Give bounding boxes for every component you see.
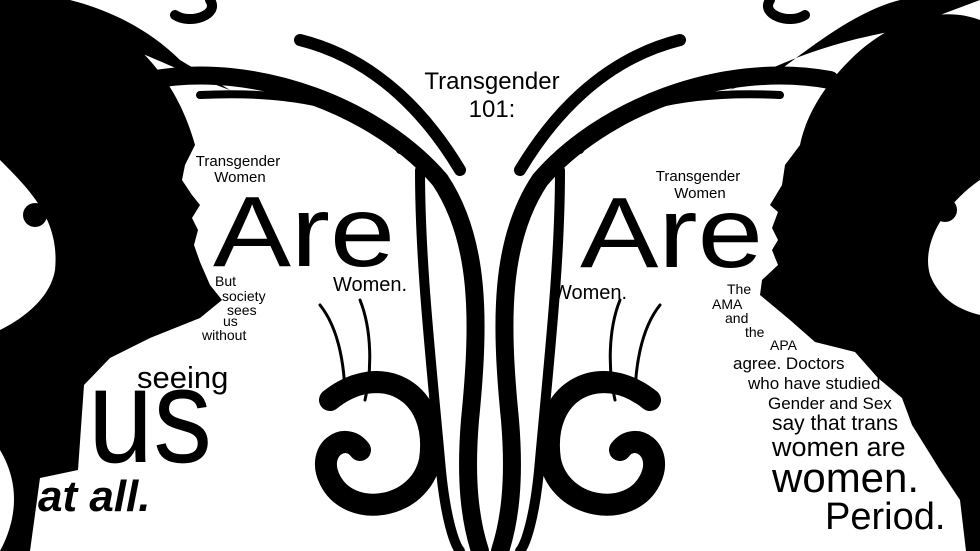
left text block: society (222, 288, 266, 304)
left text block: But (215, 273, 236, 289)
right text block: the (745, 324, 765, 340)
right text block: Women. (553, 282, 627, 304)
left text block: at all. (38, 472, 150, 521)
left text block: Women (214, 169, 266, 186)
left text block: Women. (333, 274, 407, 296)
right text block: Women (674, 185, 726, 202)
left text block: without (201, 327, 246, 343)
central ornament (150, 0, 830, 551)
left text block: sees (227, 302, 257, 318)
right text block: and (725, 310, 748, 326)
left text block: seeing (137, 360, 228, 395)
right text block (553, 168, 945, 538)
left text block: us (223, 313, 238, 329)
right text block: women are (771, 432, 906, 462)
right text block: women. (771, 454, 919, 501)
right text block: APA (770, 337, 798, 353)
right text block: Period. (825, 496, 945, 538)
right text block: AMA (712, 296, 743, 312)
right text block: Transgender (656, 168, 740, 185)
right text block: The (727, 281, 751, 297)
left text block: Transgender (196, 153, 280, 170)
right text block: agree. Doctors (733, 354, 844, 373)
right text block: who have studied (747, 374, 880, 393)
title: 101: (469, 96, 515, 123)
right silhouette (730, 0, 980, 551)
left text block (38, 153, 407, 521)
right text block: say that trans (772, 412, 898, 435)
right text block: Gender and Sex (768, 394, 892, 413)
left text block: us (88, 340, 212, 491)
title (424, 68, 560, 123)
left text block: Are (213, 176, 395, 288)
title: Transgender (424, 68, 560, 95)
right text block: Are (580, 177, 763, 289)
left silhouette (0, 0, 230, 551)
